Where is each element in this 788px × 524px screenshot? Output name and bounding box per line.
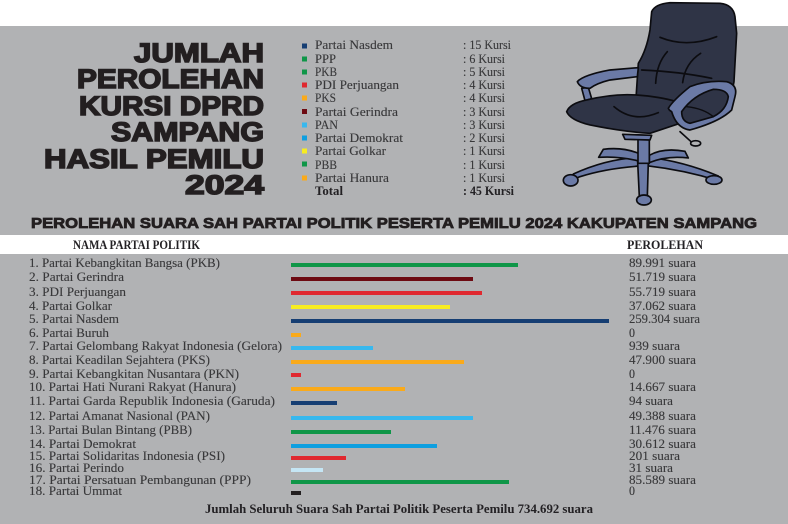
party names list: 5. Partai Nasdem: [29, 311, 119, 326]
title: KURSI DPRD: [79, 91, 264, 121]
seat legend: Partai Hanura: [315, 170, 389, 185]
seat legend: PAN: [315, 117, 339, 132]
seat legend: : 3 Kursi: [463, 104, 505, 119]
seat legend: : 45 Kursi: [463, 184, 514, 198]
party names list: 4. Partai Golkar: [29, 298, 113, 313]
party names list: 10. Partai Hati Nurani Rakyat (Hanura): [29, 379, 236, 394]
seat legend: : 15 Kursi: [463, 37, 511, 52]
party names list: 9. Partai Kebangkitan Nusantara (PKN): [29, 366, 239, 381]
vote values list: 30.612 suara: [629, 436, 696, 451]
party names list: 2. Partai Gerindra: [29, 269, 124, 284]
seat legend: : 3 Kursi: [463, 117, 505, 132]
seat legend: : 1 Kursi: [463, 143, 505, 158]
vote values list: 0: [629, 325, 635, 340]
party names list: 7. Partai Gelombang Rakyat Indonesia (Gelora): [29, 338, 282, 353]
seat legend: : 6 Kursi: [463, 51, 505, 66]
heading: vote count: PEROLEHAN SUARA SAH PARTAI POLITIK PESERTA PEMILU 2024 KAKUPATEN SAMPANG: [31, 215, 757, 232]
title: JUMLAH: [134, 38, 264, 68]
seat legend: : 2 Kursi: [463, 130, 505, 145]
party names list: 15. Partai Solidaritas Indonesia (PSI): [29, 448, 225, 463]
party names list: 12. Partai Amanat Nasional (PAN): [29, 408, 210, 423]
party names list: 1. Partai Kebangkitan Bangsa (PKB): [29, 255, 220, 270]
vote values list: 51.719 suara: [629, 269, 696, 284]
vote values list: 14.667 suara: [629, 379, 696, 394]
seat legend: : 5 Kursi: [463, 64, 505, 79]
seat legend: PKB: [315, 64, 337, 79]
party names list: [29, 255, 282, 498]
seat legend: Partai Nasdem: [315, 37, 393, 52]
vote values list: 49.388 suara: [629, 408, 696, 423]
party names list: 16. Partai Perindo: [29, 460, 124, 475]
seat legend: : 1 Kursi: [463, 170, 505, 185]
bar chart: [291, 263, 609, 495]
seat legend: : 4 Kursi: [463, 90, 505, 105]
vote values list: 37.062 suara: [629, 298, 696, 313]
title: HASIL PEMILU: [44, 144, 264, 174]
party names list: 3. PDI Perjuangan: [29, 284, 126, 299]
party names list: 13. Partai Bulan Bintang (PBB): [29, 422, 192, 437]
party names list: 8. Partai Keadilan Sejahtera (PKS): [29, 352, 210, 367]
party names list: 17. Partai Persatuan Pembangunan (PPP): [29, 472, 251, 487]
title: [44, 38, 264, 200]
seat legend: Total: [315, 184, 344, 198]
party names list: 6. Partai Buruh: [29, 325, 110, 340]
vote values list: 47.900 suara: [629, 352, 696, 367]
icon: office chair: [563, 3, 737, 205]
title: SAMPANG: [111, 117, 264, 147]
seat legend: Partai Demokrat: [315, 130, 403, 145]
seat legend: : 1 Kursi: [463, 157, 505, 172]
vote values list: 89.991 suara: [629, 255, 696, 270]
party names list: 14. Partai Demokrat: [29, 436, 136, 451]
seat legend: Partai Gerindra: [315, 104, 398, 119]
title: PEROLEHAN: [77, 64, 264, 94]
title: 2024: [185, 170, 264, 200]
vote values list: 31 suara: [629, 460, 673, 475]
vote values list: 94 suara: [629, 393, 673, 408]
vote values list: 0: [629, 366, 635, 381]
vote values list: 939 suara: [629, 338, 680, 353]
vote values list: 11.476 suara: [629, 422, 696, 437]
seat legend: PKS: [315, 90, 336, 105]
vote values list: 259.304 suara: [629, 311, 700, 326]
vote values list: [629, 255, 700, 498]
table header: party name: NAMA PARTAI POLITIK: [73, 238, 200, 252]
vote values list: 201 suara: [629, 448, 680, 463]
vote values list: 85.589 suara: [629, 472, 696, 487]
seat legend: : 4 Kursi: [463, 77, 505, 92]
party names list: 18. Partai Ummat: [29, 483, 122, 498]
seat legend: [302, 37, 514, 198]
seat legend: PBB: [315, 157, 337, 172]
seat legend: Partai Golkar: [315, 143, 387, 158]
vote values list: 0: [629, 483, 635, 498]
party names list: 11. Partai Garda Republik Indonesia (Garuda): [29, 393, 275, 408]
seat legend: PDI Perjuangan: [315, 77, 399, 92]
seat legend: PPP: [315, 51, 336, 66]
table header: votes: PEROLEHAN: [627, 238, 703, 252]
vote values list: 55.719 suara: [629, 284, 696, 299]
footer total: Jumlah Seluruh Suara Sah Partai Politik Peserta Pemilu 734.692 suara: [205, 502, 594, 516]
